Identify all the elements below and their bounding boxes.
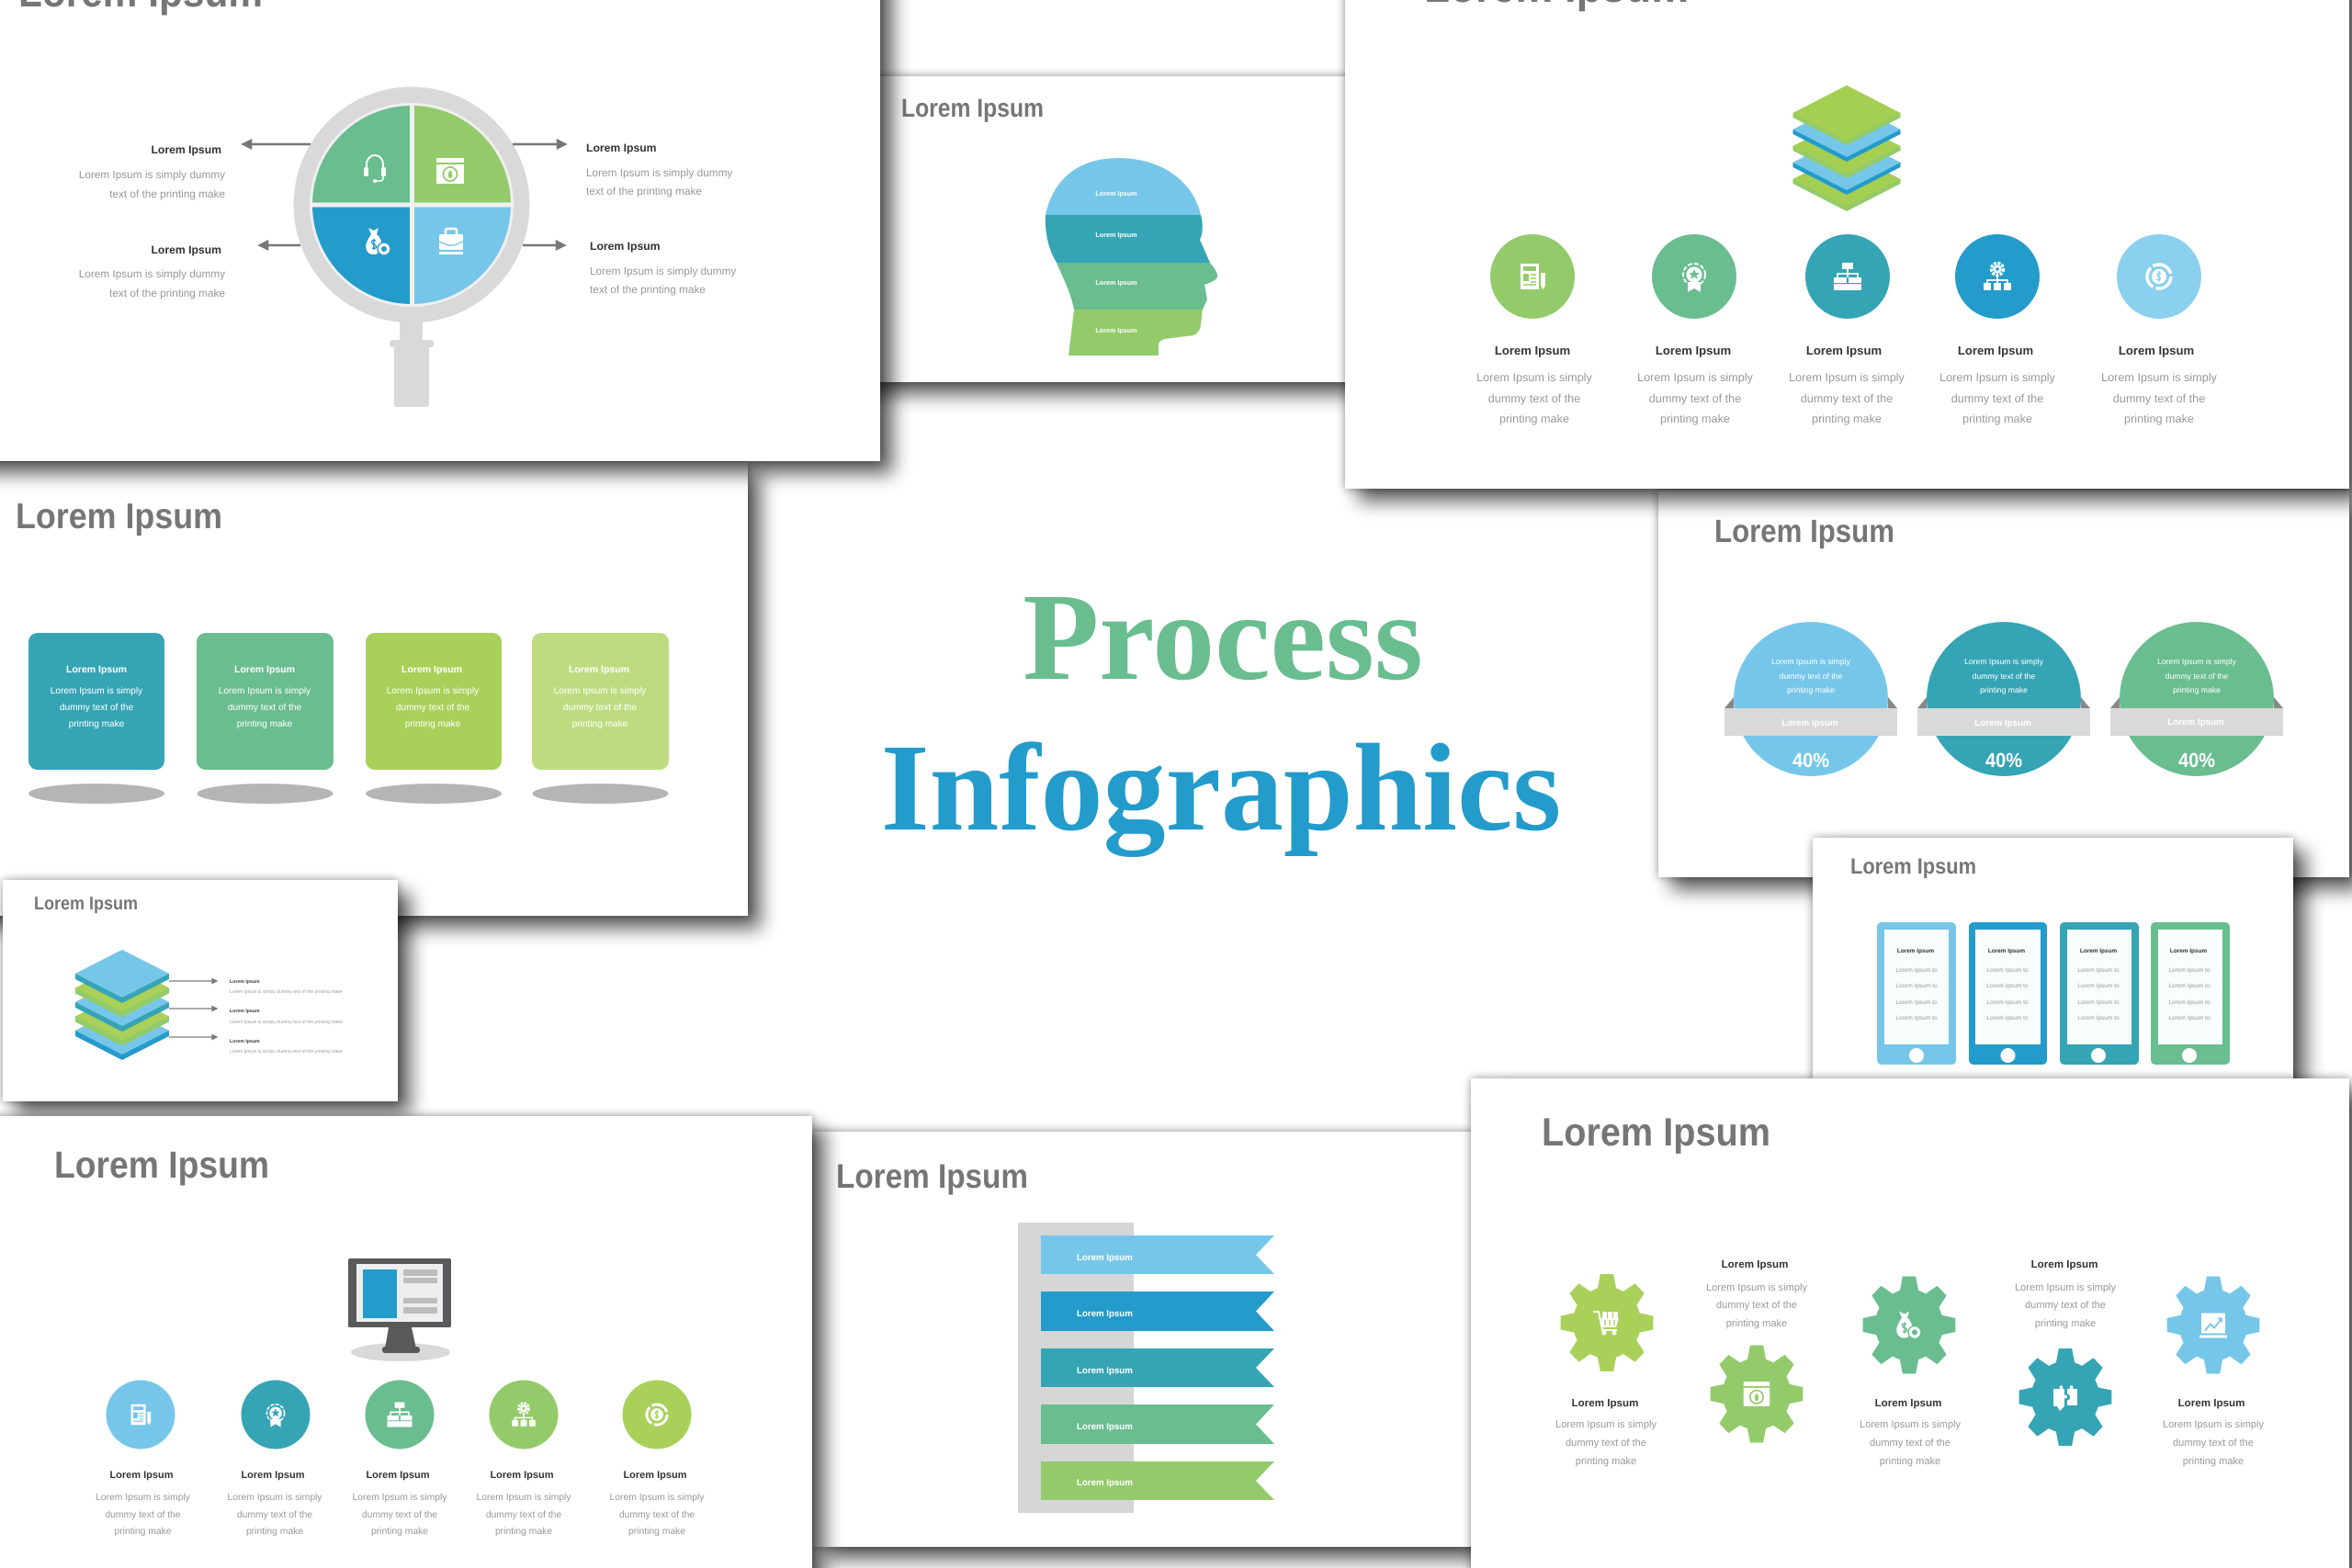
panel title: Lorem Ipsum bbox=[1850, 854, 1976, 879]
head silhouette: Lorem Ipsum bbox=[1095, 189, 1137, 197]
card 1: dummy text of the bbox=[60, 703, 133, 713]
step 4: gear org chart bbox=[477, 1380, 571, 1537]
step 5: coin bbox=[2101, 234, 2218, 425]
gear 5: chart: printing make bbox=[2183, 1456, 2244, 1467]
arrow: bottom left bbox=[260, 242, 300, 249]
gear 4: puzzle: Lorem Ipsum is simply bbox=[2015, 1282, 2116, 1293]
percentage badge 2: printing make bbox=[1980, 685, 2028, 694]
step 1: newspaper: printing make bbox=[114, 1527, 172, 1537]
phone 3: Lorem Ipsum to bbox=[2077, 1015, 2120, 1021]
card 1: Lorem Ipsum is simply bbox=[51, 686, 143, 696]
phone 4: Lorem Ipsum to bbox=[2168, 1015, 2211, 1021]
panel title: Lorem Ipsum bbox=[16, 497, 222, 536]
step 2: badge: Lorem Ipsum bbox=[1656, 344, 1731, 357]
ribbon 1 bbox=[1041, 1235, 1274, 1274]
title: Infographics bbox=[881, 719, 1561, 858]
phone 1: Lorem Ipsum to bbox=[1895, 967, 1938, 974]
label: bottom left bbox=[79, 243, 225, 299]
layered stack graphic bbox=[1793, 85, 1900, 211]
step 2: badge: Lorem Ipsum is simply bbox=[228, 1493, 322, 1503]
step 3: hierarchy: Lorem Ipsum is simply bbox=[353, 1493, 447, 1503]
step 1: newspaper bbox=[1476, 234, 1593, 425]
step 5: coin: printing make bbox=[628, 1527, 685, 1537]
label: top right: Lorem Ipsum is simply dummy bbox=[586, 166, 732, 179]
gear 1: cart: Lorem Ipsum bbox=[1572, 1397, 1638, 1409]
ribbon 1: Lorem Ipsum bbox=[1077, 1253, 1133, 1263]
ribbon 2: Lorem Ipsum bbox=[1077, 1309, 1133, 1319]
gear 5: chart bbox=[2163, 1277, 2264, 1467]
label: top left: Lorem Ipsum bbox=[151, 143, 221, 156]
step 3: hierarchy: dummy text of the bbox=[362, 1510, 437, 1520]
card 4: dummy text of the bbox=[563, 703, 637, 713]
card 1 bbox=[28, 633, 164, 804]
step 3: hierarchy: Lorem Ipsum bbox=[1806, 344, 1882, 357]
panel title: Lorem Ipsum bbox=[901, 94, 1044, 122]
step 2: badge: dummy text of the bbox=[1649, 392, 1741, 405]
step 1: newspaper: dummy text of the bbox=[105, 1510, 181, 1520]
panel: phones bbox=[1813, 838, 2293, 1132]
card 3: printing make bbox=[405, 719, 461, 729]
percentage badge 1: Lorem Ipsum bbox=[1781, 718, 1838, 728]
gear 5: chart: Lorem Ipsum is simply bbox=[2163, 1419, 2264, 1430]
phone 2 bbox=[1969, 922, 2047, 1065]
card 4 bbox=[532, 633, 669, 804]
label: layer 1 bbox=[230, 979, 343, 995]
head silhouette: Lorem Ipsum bbox=[1095, 278, 1137, 287]
card 2: printing make bbox=[237, 719, 293, 729]
card 3: Lorem Ipsum bbox=[401, 664, 462, 675]
label: bottom right: text of the printing make bbox=[590, 283, 706, 296]
step 2: badge: Lorem Ipsum is simply bbox=[1637, 371, 1754, 384]
phone 4: Lorem Ipsum to bbox=[2168, 983, 2211, 989]
head silhouette: Lorem Ipsum bbox=[1095, 231, 1137, 239]
phone 2: Lorem Ipsum to bbox=[1986, 983, 2029, 989]
gear 4: puzzle: printing make bbox=[2035, 1318, 2096, 1329]
monitor graphic bbox=[348, 1258, 451, 1361]
step 3: hierarchy: printing make bbox=[1812, 412, 1882, 425]
percentage badge 3: Lorem Ipsum is simply bbox=[2157, 657, 2237, 666]
title bbox=[881, 569, 1561, 858]
gear 3: money bag: dummy text of the bbox=[1870, 1438, 1951, 1449]
step 4: gear org chart bbox=[1939, 234, 2056, 425]
label: layer 3: Lorem Ipsum bbox=[230, 1039, 260, 1044]
percentage badge 2: dummy text of the bbox=[1973, 671, 2035, 681]
label: layer 2: Lorem Ipsum is simply dummy text of the printing make bbox=[230, 1020, 343, 1025]
ribbon 3: Lorem Ipsum bbox=[1077, 1366, 1133, 1376]
ribbon 5: Lorem Ipsum bbox=[1077, 1478, 1133, 1488]
arrow: bottom right bbox=[523, 242, 564, 249]
step 1: newspaper: Lorem Ipsum is simply bbox=[96, 1493, 191, 1503]
icon: washing machine bbox=[436, 158, 464, 184]
ribbon 5 bbox=[1041, 1461, 1274, 1500]
panel title: Lorem Ipsum bbox=[1542, 1111, 1770, 1155]
phone 3: Lorem Ipsum bbox=[2080, 948, 2117, 954]
percentage badge 2: Lorem Ipsum is simply bbox=[1964, 657, 2044, 666]
step 4: gear org chart: printing make bbox=[495, 1527, 552, 1537]
gear 2: washing machine: dummy text of the bbox=[1716, 1300, 1797, 1311]
panel title: Lorem Ipsum bbox=[34, 894, 138, 914]
gear 4: puzzle: Lorem Ipsum bbox=[2031, 1258, 2098, 1270]
label: layer 1: Lorem Ipsum bbox=[230, 979, 260, 985]
phone 3: Lorem Ipsum to bbox=[2077, 983, 2120, 989]
label: top right bbox=[586, 141, 732, 197]
phone 2: Lorem Ipsum to bbox=[1986, 967, 2029, 974]
gear 2: washing machine: Lorem Ipsum is simply bbox=[1706, 1282, 1807, 1293]
step 4: gear org chart: dummy text of the bbox=[486, 1510, 561, 1520]
phone 3 bbox=[2060, 922, 2139, 1065]
panel: gears bbox=[1471, 1078, 2349, 1568]
phone 2: Lorem Ipsum bbox=[1988, 948, 2025, 954]
gear 5: chart: Lorem Ipsum bbox=[2178, 1397, 2245, 1409]
gear 3: money bag: Lorem Ipsum bbox=[1875, 1397, 1941, 1409]
gear 3: money bag: printing make bbox=[1880, 1456, 1940, 1467]
panel title: Lorem Ipsum bbox=[836, 1157, 1028, 1195]
step 5: coin: Lorem Ipsum bbox=[623, 1470, 687, 1481]
percentage badge 2 bbox=[1917, 622, 2090, 776]
head silhouette: Lorem Ipsum bbox=[1095, 326, 1137, 334]
gear 1: cart: Lorem Ipsum is simply bbox=[1555, 1419, 1657, 1430]
phone 4: Lorem Ipsum bbox=[2170, 948, 2207, 954]
label: bottom left: text of the printing make bbox=[109, 287, 225, 299]
label: top left bbox=[79, 143, 225, 200]
step 2: badge: printing make bbox=[1660, 412, 1730, 425]
phone 1: Lorem Ipsum to bbox=[1895, 999, 1938, 1006]
card 2 bbox=[197, 633, 334, 804]
card 1: printing make bbox=[69, 719, 125, 729]
step 5: coin: printing make bbox=[2124, 412, 2194, 425]
phone 2: Lorem Ipsum to bbox=[1986, 999, 2029, 1006]
head silhouette bbox=[1046, 158, 1217, 355]
phone 3: Lorem Ipsum to bbox=[2077, 967, 2120, 974]
phone 1: Lorem Ipsum bbox=[1897, 948, 1934, 954]
phone 4: Lorem Ipsum to bbox=[2168, 999, 2211, 1006]
arrow: layer 3 bbox=[169, 1034, 217, 1040]
percentage badge 3: 40% bbox=[2178, 749, 2215, 772]
card 4: Lorem Ipsum is simply bbox=[554, 686, 647, 696]
card 2: dummy text of the bbox=[228, 703, 301, 713]
icon: money bag bbox=[366, 228, 390, 255]
step 5: coin: dummy text of the bbox=[2113, 392, 2205, 405]
label: bottom right bbox=[590, 240, 736, 296]
label: top right: Lorem Ipsum bbox=[586, 141, 657, 154]
gear 2: washing machine: Lorem Ipsum bbox=[1722, 1258, 1788, 1270]
label: layer 2: Lorem Ipsum bbox=[230, 1009, 260, 1014]
panel title: Lorem Ipsum bbox=[54, 1144, 269, 1186]
label: bottom left: Lorem Ipsum is simply dummy bbox=[79, 267, 225, 280]
gear 3: money bag: Lorem Ipsum is simply bbox=[1860, 1419, 1961, 1430]
step 5: coin: dummy text of the bbox=[619, 1510, 695, 1520]
step 4: gear org chart: Lorem Ipsum is simply bbox=[477, 1493, 571, 1503]
percentage badge 3 bbox=[2110, 622, 2283, 776]
phone 4: Lorem Ipsum to bbox=[2168, 967, 2211, 974]
step 2: badge bbox=[1637, 234, 1754, 425]
card 3: dummy text of the bbox=[396, 703, 469, 713]
label: bottom right: Lorem Ipsum bbox=[590, 240, 661, 253]
percentage badge 1: Lorem Ipsum is simply bbox=[1771, 657, 1851, 666]
step 4: gear org chart: Lorem Ipsum bbox=[1958, 344, 2033, 357]
card 3: Lorem Ipsum is simply bbox=[387, 686, 480, 696]
panel: layered stack with five circles bbox=[1345, 0, 2349, 489]
step 2: badge: dummy text of the bbox=[237, 1510, 312, 1520]
gear 5: chart: dummy text of the bbox=[2173, 1438, 2254, 1449]
step 5: coin bbox=[610, 1380, 705, 1537]
panel: head diagram bbox=[845, 76, 1396, 382]
phone 1: Lorem Ipsum to bbox=[1895, 983, 1938, 989]
step 1: newspaper bbox=[96, 1380, 191, 1537]
panel: ribbons bbox=[813, 1132, 1511, 1547]
card 2: Lorem Ipsum bbox=[234, 664, 295, 675]
phone 2: Lorem Ipsum to bbox=[1986, 1015, 2029, 1021]
card 4: printing make bbox=[572, 719, 628, 729]
ribbon 4: Lorem Ipsum bbox=[1077, 1422, 1133, 1432]
step 1: newspaper: printing make bbox=[1499, 412, 1569, 425]
step 3: hierarchy: dummy text of the bbox=[1801, 392, 1893, 405]
step 5: coin: Lorem Ipsum bbox=[2119, 344, 2194, 357]
phone 3: Lorem Ipsum to bbox=[2077, 999, 2120, 1006]
title: Process bbox=[1023, 569, 1423, 706]
panel: three percentage circles bbox=[1658, 491, 2349, 877]
label: layer 3 bbox=[230, 1039, 343, 1055]
gear 4: puzzle: dummy text of the bbox=[2025, 1300, 2106, 1311]
label: top left: Lorem Ipsum is simply dummy bbox=[79, 168, 225, 181]
panel: magnifying glass bbox=[0, 0, 880, 461]
label: layer 2 bbox=[230, 1009, 343, 1025]
step 3: hierarchy: Lorem Ipsum bbox=[366, 1470, 430, 1481]
arrow: top left bbox=[243, 141, 311, 148]
card 1: Lorem Ipsum bbox=[66, 664, 127, 675]
panel: four coloured cards bbox=[0, 462, 748, 916]
step 1: newspaper: Lorem Ipsum is simply bbox=[1476, 371, 1593, 384]
step 3: hierarchy bbox=[1789, 234, 1905, 425]
layered stack graphic bbox=[75, 950, 169, 1060]
step 2: badge: Lorem Ipsum bbox=[241, 1470, 305, 1481]
card 2: Lorem Ipsum is simply bbox=[219, 686, 311, 696]
label: bottom right: Lorem Ipsum is simply dummy bbox=[590, 265, 736, 277]
icon: briefcase bbox=[439, 229, 463, 254]
gear 3: money bag bbox=[1860, 1277, 1961, 1467]
ribbon 4 bbox=[1041, 1404, 1274, 1444]
gear 1: cart: dummy text of the bbox=[1566, 1438, 1646, 1449]
arrow: top right bbox=[513, 141, 565, 148]
gear 2: washing machine bbox=[1706, 1258, 1807, 1442]
label: top right: text of the printing make bbox=[586, 185, 702, 197]
step 3: hierarchy bbox=[353, 1380, 447, 1537]
step 5: coin: Lorem Ipsum is simply bbox=[610, 1493, 705, 1503]
percentage badge 2: Lorem Ipsum bbox=[1974, 718, 2031, 728]
panel: small stack slide bbox=[3, 880, 398, 1101]
step 4: gear org chart: dummy text of the bbox=[1951, 392, 2043, 405]
percentage badge 1: dummy text of the bbox=[1780, 671, 1842, 681]
magnifier graphic bbox=[294, 86, 529, 407]
step 4: gear org chart: Lorem Ipsum is simply bbox=[1939, 371, 2056, 384]
card 3 bbox=[366, 633, 502, 804]
percentage badge 3: printing make bbox=[2173, 685, 2221, 694]
step 3: hierarchy: printing make bbox=[371, 1527, 428, 1537]
gear 4: puzzle bbox=[2015, 1258, 2116, 1446]
percentage badge 3: Lorem Ipsum bbox=[2167, 717, 2224, 728]
icon: headset bbox=[364, 155, 386, 183]
gear 2: washing machine: printing make bbox=[1726, 1318, 1787, 1329]
arrow: layer 1 bbox=[169, 979, 217, 983]
card 4: Lorem Ipsum bbox=[569, 664, 629, 675]
phone 4 bbox=[2151, 922, 2230, 1065]
step 3: hierarchy: Lorem Ipsum is simply bbox=[1789, 371, 1905, 384]
percentage badge 2: 40% bbox=[1985, 749, 2022, 772]
step 5: coin: Lorem Ipsum is simply bbox=[2101, 371, 2218, 384]
step 2: badge bbox=[228, 1380, 322, 1537]
ribbon 3 bbox=[1041, 1348, 1274, 1387]
phone 1 bbox=[1877, 922, 1956, 1065]
step 4: gear org chart: printing make bbox=[1962, 412, 2032, 425]
step 4: gear org chart: Lorem Ipsum bbox=[490, 1470, 554, 1481]
gear 1: cart: printing make bbox=[1576, 1456, 1636, 1467]
percentage badge 1: printing make bbox=[1787, 685, 1835, 694]
step 1: newspaper: Lorem Ipsum bbox=[1495, 344, 1570, 357]
percentage badge 1 bbox=[1724, 622, 1897, 776]
step 1: newspaper: dummy text of the bbox=[1488, 392, 1580, 405]
grey ribbon backing bbox=[1018, 1223, 1134, 1513]
gear 1: cart bbox=[1555, 1274, 1657, 1467]
percentage badge 1: 40% bbox=[1792, 749, 1829, 772]
percentage badge 3: dummy text of the bbox=[2165, 671, 2228, 681]
arrow: layer 2 bbox=[169, 1007, 217, 1010]
label: bottom left: Lorem Ipsum bbox=[151, 243, 221, 256]
panel: monitor with five circles bbox=[0, 1116, 812, 1568]
label: layer 3: Lorem Ipsum is simply dummy text of the printing make bbox=[230, 1049, 343, 1055]
ribbon 2 bbox=[1041, 1292, 1274, 1331]
label: top left: text of the printing make bbox=[109, 187, 225, 200]
step 2: badge: printing make bbox=[246, 1527, 303, 1537]
step 1: newspaper: Lorem Ipsum bbox=[109, 1470, 174, 1481]
phone 1: Lorem Ipsum to bbox=[1895, 1015, 1938, 1021]
label: layer 1: Lorem Ipsum is simply dummy text of the printing make bbox=[230, 989, 343, 995]
panel title: Lorem Ipsum bbox=[1714, 513, 1894, 549]
